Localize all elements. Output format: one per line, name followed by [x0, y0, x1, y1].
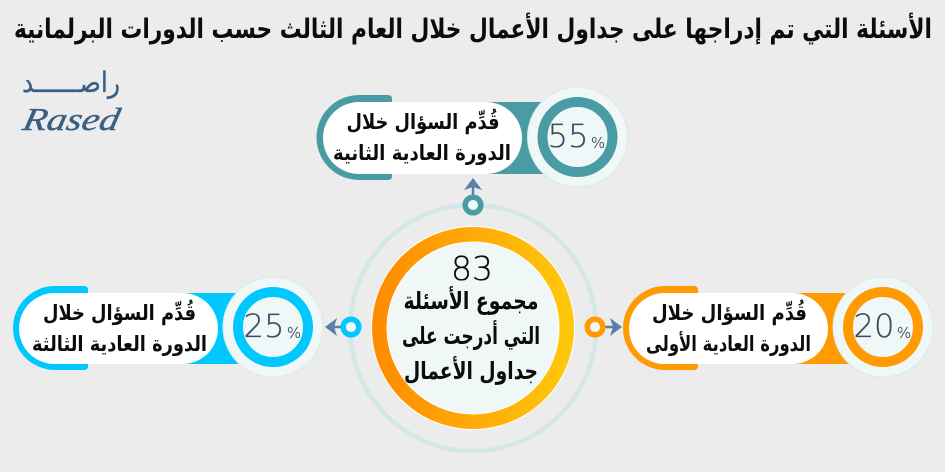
connector: top dot and arrow: [464, 178, 482, 213]
percent badge: 25: [244, 307, 284, 345]
card text: [333, 107, 511, 165]
panel: second session 55%: [316, 87, 628, 187]
percent badge: %: [591, 134, 605, 152]
central text: [402, 286, 540, 385]
card text: قُدِّم السؤال خلال: [43, 298, 196, 325]
percent badge: %: [897, 324, 911, 342]
connector: left dot and arrow: [325, 318, 359, 336]
percent badge: [223, 277, 323, 377]
connector: right dot and arrow: [587, 318, 622, 336]
card text: الدورة العادية الثانية: [333, 141, 511, 165]
logo: Rased: Rased: [19, 101, 124, 137]
card text: الدورة العادية الأولى: [646, 330, 811, 356]
percent badge: 20: [854, 307, 894, 345]
central text: جداول الأعمال: [404, 356, 538, 385]
card text: قُدِّم السؤال خلال: [652, 298, 807, 325]
central panel: total questions: [350, 205, 596, 451]
card text: [646, 298, 811, 356]
percent badge: 55: [548, 117, 588, 155]
card text: قُدِّم السؤال خلال: [346, 107, 500, 134]
panel: third session 25%: [13, 277, 323, 377]
logo: Rased: راصــــــد: [22, 66, 120, 99]
total number: 83: [451, 249, 493, 288]
panel: first session 20%: [623, 277, 933, 377]
logo: Rased: [19, 66, 124, 137]
percent badge: %: [287, 324, 301, 342]
percent badge: [833, 277, 933, 377]
card text: الدورة العادية الثالثة: [32, 332, 207, 356]
central text: مجموع الأسئلة: [404, 286, 538, 315]
card text: [32, 298, 207, 356]
central text: التي أدرجت على: [402, 320, 540, 350]
percent badge: [528, 87, 628, 187]
